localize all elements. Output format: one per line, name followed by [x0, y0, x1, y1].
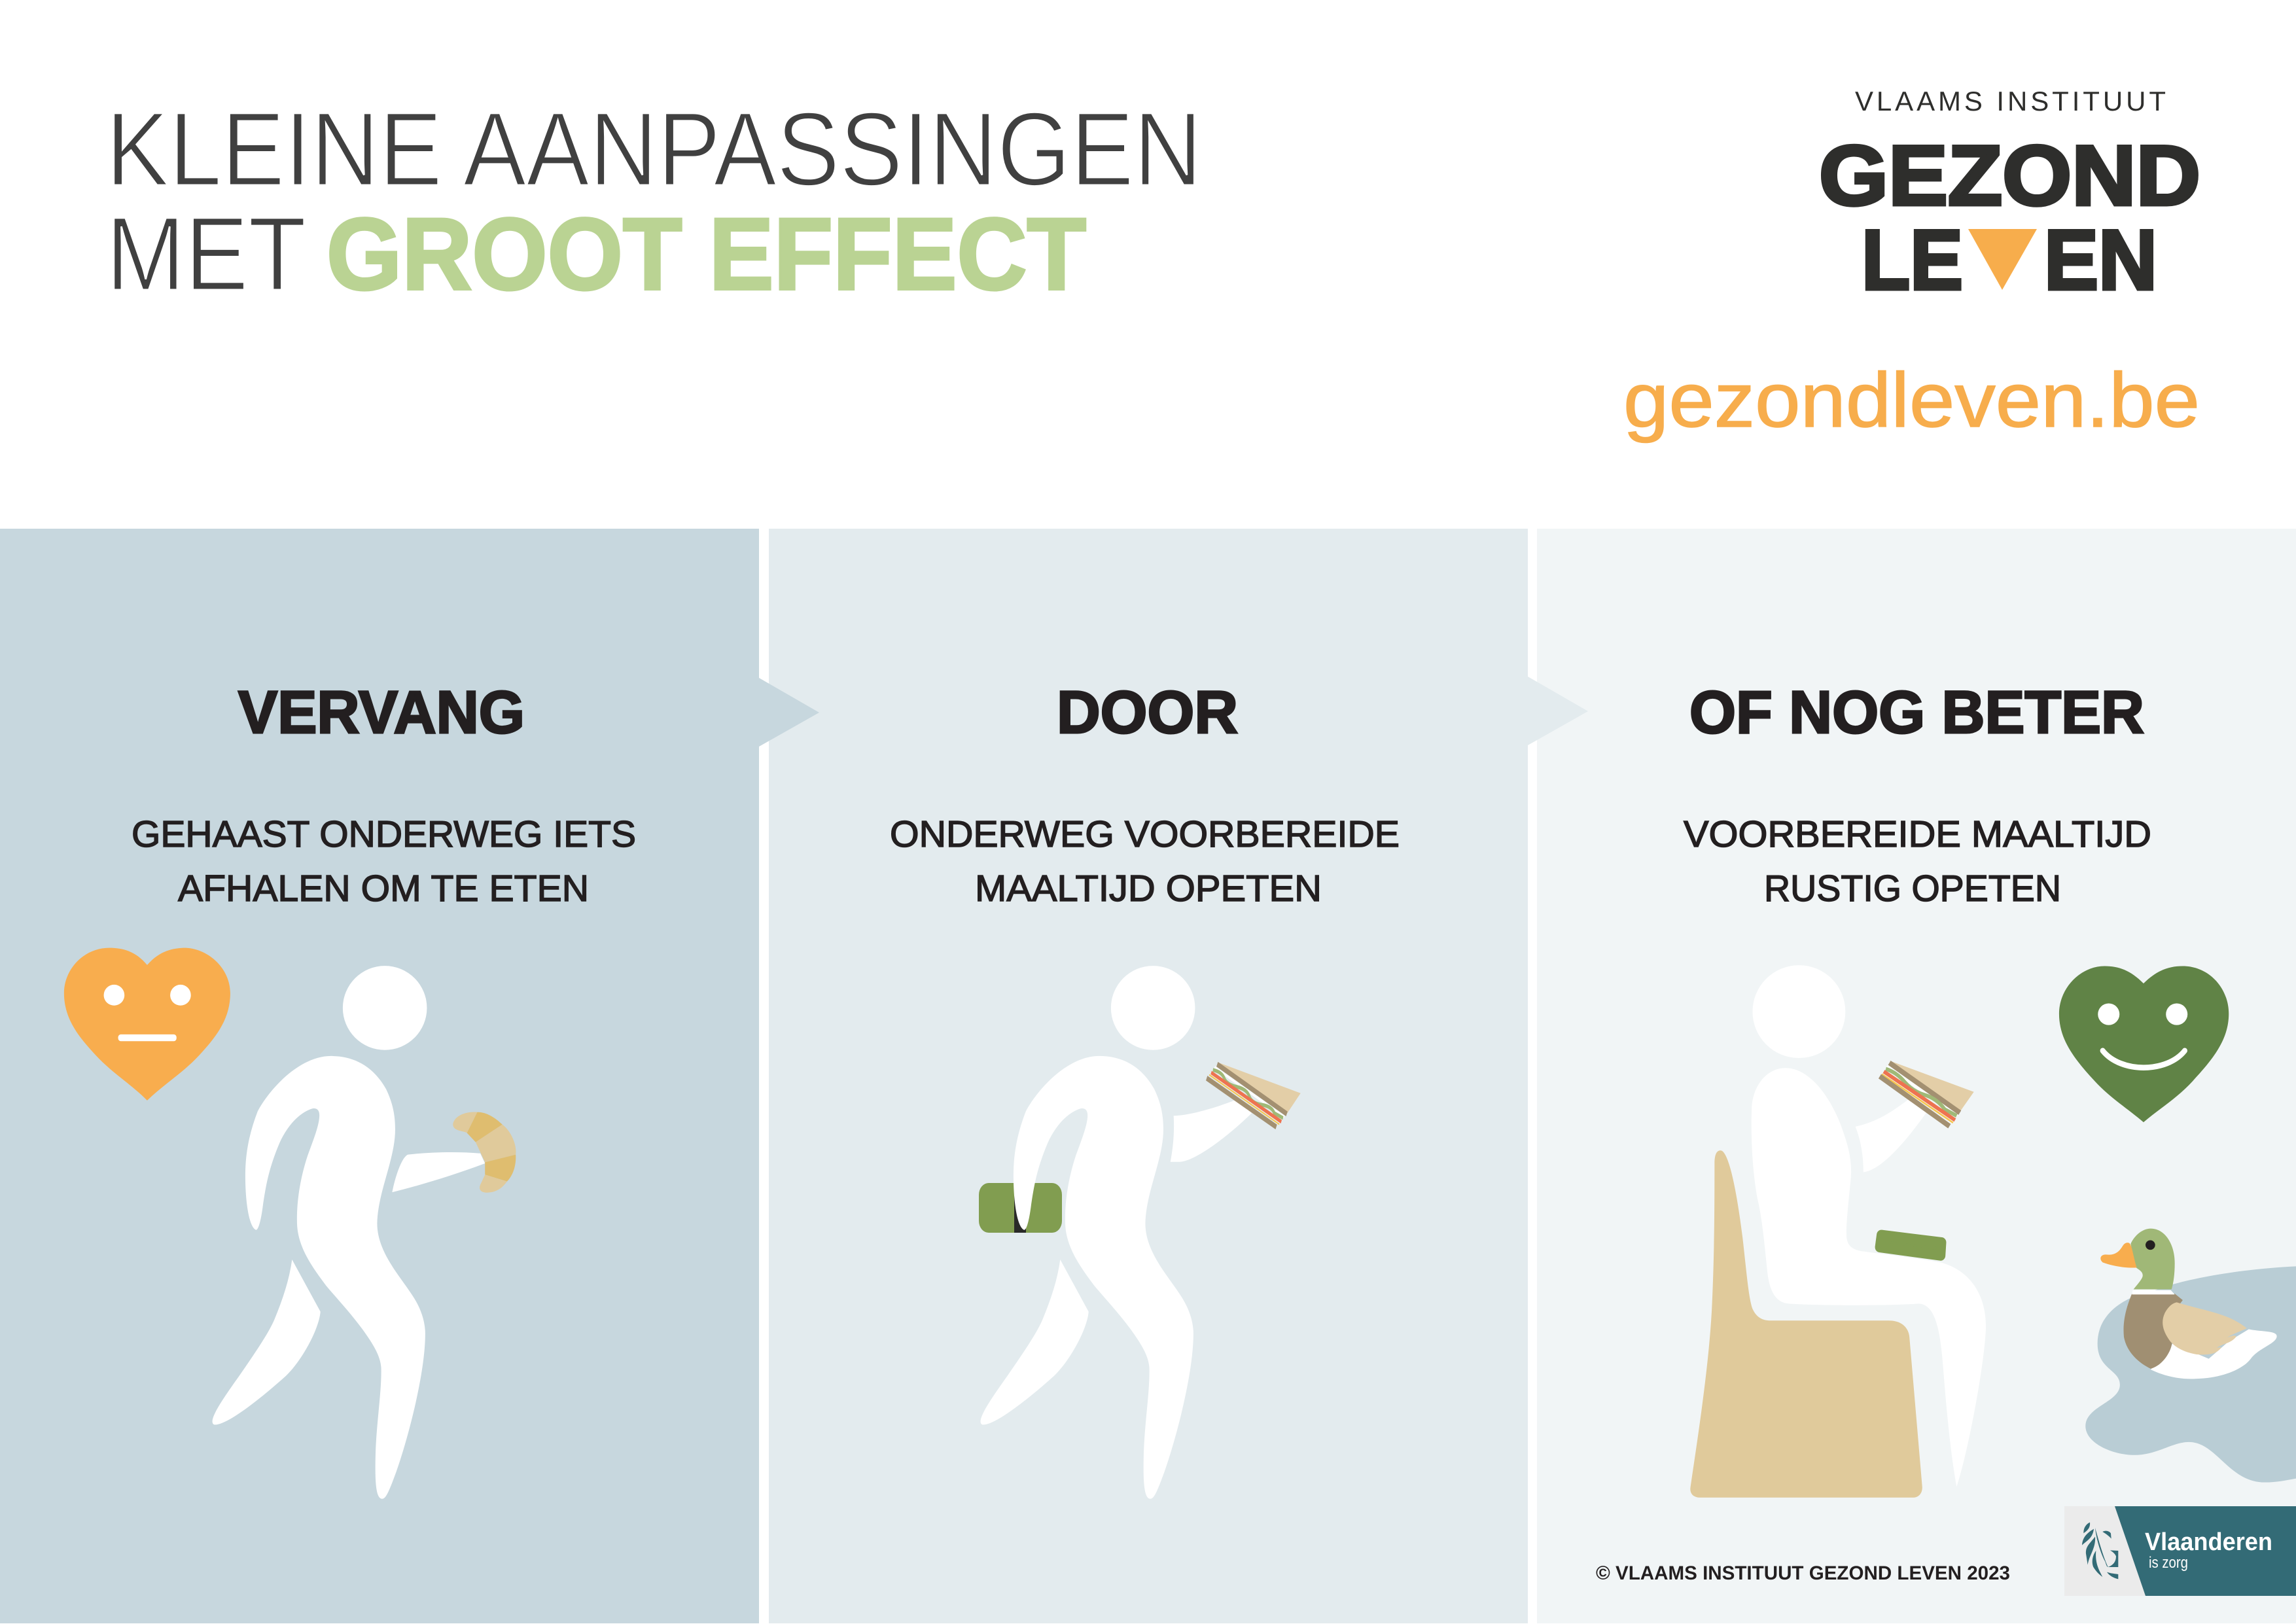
- illustration: arm and sandwich: [1171, 1063, 1301, 1162]
- text: onderweg voorbereide maaltijd opeten: ONDERWEG VOORBEREIDE: [890, 813, 1400, 855]
- text: gehaast onderweg iets afhalen om te eten: AFHALEN OM TE ETEN: [178, 868, 589, 909]
- title: [106, 90, 1202, 312]
- logo: Vlaanderen is zorg: [2064, 1506, 2296, 1596]
- icon: neutral orange heart: [64, 948, 230, 1101]
- icon: lunchbox carried in hand: [979, 1183, 1062, 1233]
- title: MET: [106, 195, 306, 312]
- logo: Vlaanderen is zorg: is zorg: [2149, 1554, 2188, 1572]
- text: gehaast onderweg iets afhalen om te eten: [132, 813, 636, 909]
- arrow: door to of nog beter: [1528, 677, 1588, 745]
- logo: Vlaams Instituut Gezond Leven: LE: [1862, 212, 1963, 308]
- illustration: walking person: [981, 966, 1195, 1499]
- text: onderweg voorbereide maaltijd opeten: MAALTIJD OPETEN: [975, 868, 1322, 909]
- website url: gezondleven.be: [1623, 357, 2200, 444]
- text: voorbereide maaltijd rustig opeten: [1684, 813, 2151, 909]
- illustration: walking person with croissant: [213, 966, 516, 1499]
- logo: Vlaams Instituut Gezond Leven: VLAAMS INSTITUUT: [1855, 86, 2166, 116]
- illustration: duck on pond: [2085, 1229, 2296, 1483]
- illustration: seated person with chair, sandwich and lunchbox: [1690, 965, 1986, 1498]
- heading: of nog beter: OF NOG BETER: [1689, 679, 2144, 746]
- text: gehaast onderweg iets afhalen om te eten: GEHAAST ONDERWEG IETS: [132, 813, 636, 855]
- heading: door: DOOR: [1057, 679, 1238, 746]
- copyright: © VLAAMS INSTITUUT GEZOND LEVEN 2023: [1596, 1562, 2010, 1584]
- panel: vervang: [0, 529, 819, 1623]
- title: KLEINE AANPASSINGEN: [106, 90, 1202, 207]
- arrow: vervang to door: [759, 678, 819, 747]
- panel: door: [769, 529, 1588, 1623]
- panel: of nog beter: [1537, 529, 2296, 1623]
- logo: Vlaams Instituut Gezond Leven: GEZOND: [1819, 128, 2200, 223]
- logo: Vlaams Instituut Gezond Leven: [1819, 86, 2200, 308]
- title: GROOT EFFECT: [327, 198, 1086, 311]
- logo: Vlaams Instituut Gezond Leven: EN: [2044, 212, 2157, 308]
- text: onderweg voorbereide maaltijd opeten: [890, 813, 1400, 909]
- heading: vervang: VERVANG: [238, 679, 525, 746]
- logo: Vlaanderen is zorg: Vlaanderen: [2145, 1528, 2272, 1556]
- text: voorbereide maaltijd rustig opeten: VOORBEREIDE MAALTIJD: [1684, 813, 2151, 855]
- icon: happy green heart: [2059, 966, 2229, 1122]
- text: voorbereide maaltijd rustig opeten: RUSTIG OPETEN: [1764, 868, 2061, 909]
